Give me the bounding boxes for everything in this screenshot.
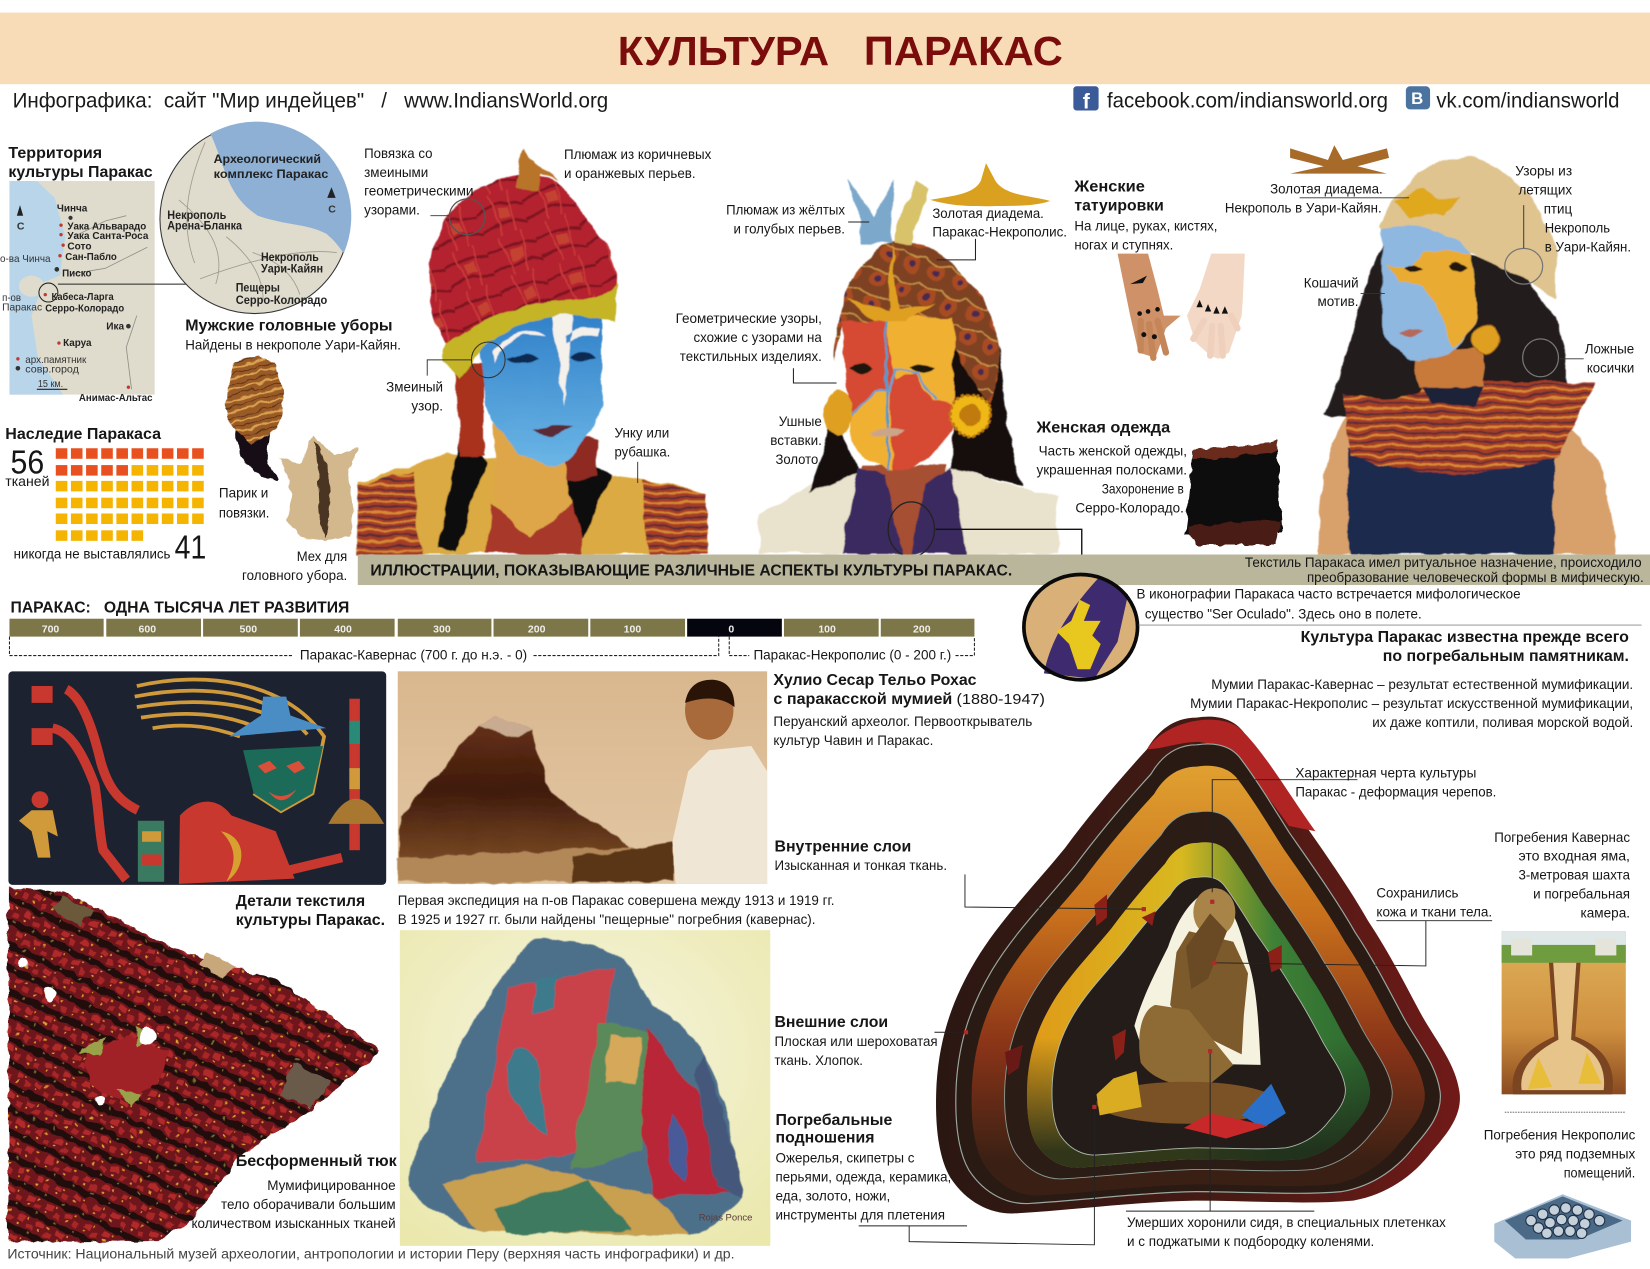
label: wig xyxy=(219,486,269,521)
label: headband xyxy=(364,146,474,218)
label: gold diadem: Паракас-Некрополис. xyxy=(932,225,1067,240)
text: grave offerings xyxy=(776,1112,951,1223)
text: inner layers: Внутренние слои xyxy=(774,838,911,855)
map inset circle: С xyxy=(328,204,336,216)
text: outer layers: Плоская или шероховатая xyxy=(774,1034,938,1049)
text: mythic creature: существо "Ser Oculado". Здесь оно в полете. xyxy=(1145,607,1422,622)
heading: burial monuments xyxy=(1301,629,1629,665)
text: inner layers xyxy=(774,838,947,873)
label: wig: повязки. xyxy=(219,506,269,521)
text: first expedition: Первая экспедиция на п-ов Паракас совершена между 1913 и 1919 гг. xyxy=(398,893,834,908)
image: woven textile fragment xyxy=(8,887,379,1242)
timeline bars: 500 xyxy=(240,623,257,635)
number 56: тканей xyxy=(5,474,49,489)
text: outer layers xyxy=(774,1014,938,1068)
regional map: Паракас xyxy=(2,301,42,313)
label: snake motif: узор. xyxy=(411,398,443,413)
timeline bars xyxy=(9,619,974,637)
markers on cross-section xyxy=(964,900,1216,1109)
label: headband: змеиными xyxy=(364,165,428,180)
label: geometric patterns: Геометрические узоры, xyxy=(676,311,822,326)
icon: gold diadem xyxy=(930,163,1050,206)
regional map xyxy=(0,181,197,404)
timeline bars: 200 xyxy=(528,623,546,635)
timeline bars: 100 xyxy=(624,623,641,635)
label: preserved skin: кожа и ткани тела. xyxy=(1376,905,1492,919)
text: Cavernas burials: это входная яма, xyxy=(1518,849,1630,864)
text: mummies xyxy=(1190,677,1633,730)
text: Julio Tello xyxy=(773,672,1045,748)
tattoos text: ногах и ступнях. xyxy=(1074,237,1173,252)
burial basket xyxy=(1096,1082,1277,1124)
leaders for diadem man xyxy=(793,222,975,383)
text: Cavernas burials xyxy=(1494,830,1630,921)
text: grave offerings: подношения xyxy=(776,1130,874,1147)
panel: territory map xyxy=(0,122,351,404)
text: grave offerings: перьями, одежда, керамика, xyxy=(776,1170,951,1185)
credits line: Инфографика: сайт "Мир индейцев" / www.IndiansWorld.org xyxy=(13,89,608,112)
timeline bars: 600 xyxy=(139,623,156,635)
icon: fur headdress xyxy=(279,436,357,542)
label: geometric patterns xyxy=(676,311,822,364)
number 41: 41 xyxy=(175,530,206,567)
label: flying birds xyxy=(1515,164,1631,254)
text: grave offerings: Ожерелья, скипетры с xyxy=(776,1151,915,1166)
figure: woman with painted face xyxy=(1317,158,1617,555)
map inset circle: Серро-Колорадо xyxy=(236,295,327,307)
image: painted funerary bundle xyxy=(400,930,770,1246)
label: fur xyxy=(242,549,347,583)
timeline bars: 100 xyxy=(818,623,836,635)
label: gold diadem: Золотая диадема. xyxy=(932,206,1044,221)
map inset circle: комплекс Паракас xyxy=(214,169,329,181)
heading: burial monuments: Культура Паракас известна прежде всего xyxy=(1301,629,1629,646)
label: fur: Мех для xyxy=(297,549,347,564)
number 56: 56 xyxy=(11,445,44,482)
label: flying birds: в Уари-Кайян. xyxy=(1545,239,1631,254)
icon: bird gold diadem xyxy=(1290,145,1389,174)
label: brown plume: Плюмаж из коричневых xyxy=(564,147,712,162)
label: flying birds: Узоры из xyxy=(1515,164,1572,179)
tattoos text: На лице, руках, кистях, xyxy=(1074,218,1218,233)
label: gold diadem 2 xyxy=(1225,182,1383,216)
text: Necropolis burials xyxy=(1484,1128,1635,1180)
label: skull deformation: Характерная черта культуры xyxy=(1295,766,1476,781)
timeline heading: ПАРАКАС: ОДНА ТЫСЯЧА ЛЕТ РАЗВИТИЯ xyxy=(11,599,349,616)
label: skull deformation: Паракас - деформация черепов. xyxy=(1295,785,1496,800)
map inset circle: Арена-Бланка xyxy=(167,220,243,232)
number 41: никогда не выставлялись xyxy=(14,547,170,562)
leaders for cross-section xyxy=(859,780,1492,1245)
text: Cavernas burials: 3-метровая шахта xyxy=(1518,868,1630,883)
label: skull deformation xyxy=(1295,766,1496,800)
regional map: Каруа xyxy=(63,337,92,349)
text: Necropolis burials: помещений. xyxy=(1564,1165,1635,1180)
label: brown plume xyxy=(564,147,712,181)
text: textile details: Детали текстиля xyxy=(236,893,365,910)
label: yellow and blue plume xyxy=(726,203,845,237)
title banner: КУЛЬТУРА ПАРАКАС xyxy=(618,28,1063,74)
panel: legacy pictogram xyxy=(5,426,206,567)
text: Cavernas burials: камера. xyxy=(1581,906,1630,921)
title banner xyxy=(0,13,1650,84)
highlight circle: snake headband xyxy=(449,199,485,235)
text: Julio Tello: (1880-1947) xyxy=(957,692,1045,708)
period labels: Паракас-Некрополис (0 - 200 г.) xyxy=(753,648,951,663)
label: seated burial: и с поджатыми к подбородку коленями. xyxy=(1127,1234,1374,1249)
leaders for woman xyxy=(1300,198,1584,359)
label: snake motif xyxy=(386,379,443,413)
label: feline motif: мотив. xyxy=(1317,294,1359,309)
source note: Источник: Национальный музей археологии, антропологии и истории Перу (верхняя часть инфографики) и др. xyxy=(7,1246,735,1261)
label: headband: узорами. xyxy=(364,203,420,218)
regional map: Чинча xyxy=(57,203,87,214)
tattoos text: Женские xyxy=(1073,179,1145,196)
text: Necropolis burials: Погребения Некрополис xyxy=(1484,1128,1635,1143)
text: Julio Tello: Хулио Сесар Тельо Рохас xyxy=(773,672,977,689)
text: Julio Tello: Перуанский археолог. Первооткрыватель xyxy=(773,714,1032,729)
text: inner layers: Изысканная и тонкая ткань. xyxy=(774,858,947,873)
clothing text: Захоронение в xyxy=(1102,482,1184,496)
heading: burial monuments: по погребальным памятникам. xyxy=(1383,648,1629,665)
period labels xyxy=(300,648,951,663)
map inset circle: Некрополь xyxy=(261,252,319,264)
legacy heading: Наследие Паракаса xyxy=(5,426,162,443)
text: Cavernas burials: и погребальная xyxy=(1533,887,1630,902)
label: preserved skin: Сохранились xyxy=(1376,886,1458,901)
text: shapeless bale: тело оборачивали большим xyxy=(221,1197,396,1212)
regional map: Уака Санта-Роса xyxy=(67,230,149,242)
clothing text: Женская одежда xyxy=(1035,419,1171,436)
text: grave offerings: инструменты для плетения xyxy=(776,1208,945,1223)
clothing text xyxy=(1035,419,1187,515)
label: ear inserts: вставки. xyxy=(770,433,822,448)
label: flying birds: летящих xyxy=(1518,183,1572,198)
label: yellow and blue plume: Плюмаж из жёлтых xyxy=(726,203,845,218)
caption band: ИЛЛЮСТРАЦИИ, ПОКАЗЫВАЮЩИЕ РАЗЛИЧНЫЕ АСПЕКТЫ КУЛЬТУРЫ ПАРАКАС. xyxy=(370,563,1012,580)
timeline bars: 700 xyxy=(42,623,59,635)
label: feline motif: Кошачий xyxy=(1304,275,1359,290)
regional map: 15 км. xyxy=(38,378,63,390)
timeline brackets xyxy=(9,637,974,656)
diagram: shaft tomb xyxy=(1502,931,1626,1094)
label: snake motif: Змеиный xyxy=(386,379,443,394)
regional map: п-ов xyxy=(2,292,21,304)
label: geometric patterns: схожие с узорами на xyxy=(693,330,822,345)
label: ear inserts: Ушные xyxy=(779,414,822,429)
label: feline motif xyxy=(1304,275,1359,309)
label: gold diadem 2: Золотая диадема. xyxy=(1270,182,1383,197)
label: ear inserts xyxy=(770,414,822,467)
timeline xyxy=(9,599,974,663)
regional map: Писко xyxy=(62,268,92,280)
text: mummies: Мумии Паракас-Некрополис – результат искусственной мумификации, xyxy=(1190,696,1633,711)
number 41 xyxy=(14,530,206,567)
headdress heading xyxy=(185,317,401,352)
diagram: necropolis chamber xyxy=(1494,1194,1631,1258)
tattoos text xyxy=(1073,179,1218,252)
icon: wig and bands xyxy=(227,357,284,481)
label: gold diadem xyxy=(932,206,1067,240)
tattoos text: татуировки xyxy=(1074,197,1164,214)
unit chart of 56 textiles xyxy=(56,448,204,541)
regional map: Серро-Колорадо xyxy=(45,302,125,314)
label: false braids: Ложные xyxy=(1585,342,1634,357)
label: geometric patterns: текстильных изделиях. xyxy=(680,349,822,364)
map heading xyxy=(8,145,153,181)
timeline bars: 400 xyxy=(334,623,352,635)
leaders for man with turban xyxy=(427,216,638,483)
text: first expedition xyxy=(398,893,834,927)
label: preserved skin xyxy=(1376,886,1492,919)
image: textile with flying figure xyxy=(8,671,386,885)
label: seated burial xyxy=(1127,1215,1446,1249)
label: unku shirt xyxy=(615,426,670,460)
regional map: Анимас-Альтас xyxy=(79,392,153,404)
figure: man with gold diadem xyxy=(758,179,1059,557)
caption band xyxy=(358,555,1650,585)
map inset circle: Пещеры xyxy=(236,282,280,294)
credits line xyxy=(13,86,1619,113)
text: mythic creature xyxy=(1136,587,1642,625)
map inset circle: Уари-Кайян xyxy=(261,264,323,276)
clothing text: украшенная полосками. xyxy=(1037,463,1187,478)
panel: female tattoos xyxy=(1073,179,1245,359)
highlight circle: bird pattern xyxy=(1505,248,1543,284)
label: headband: геометрическими xyxy=(364,184,474,199)
clothing text: Часть женской одежды, xyxy=(1039,444,1187,459)
image: Tello with mummy xyxy=(398,671,767,884)
text: shapeless bale xyxy=(192,1153,397,1231)
mummy figure xyxy=(1096,888,1286,1139)
connector to medallion xyxy=(935,529,1082,573)
text: outer layers: ткань. Хлопок. xyxy=(774,1053,863,1068)
label: false braids xyxy=(1585,342,1634,375)
text: grave offerings: еда, золото, ножи, xyxy=(776,1189,890,1204)
text: mummies: Мумии Паракас-Кавернас – результат естественной мумификации. xyxy=(1211,677,1633,692)
regional map: Сан-Пабло xyxy=(65,251,117,263)
map heading: культуры Паракас xyxy=(8,164,153,181)
map inset circle xyxy=(160,122,351,314)
label: fur: головного убора. xyxy=(242,568,347,583)
credits line: B xyxy=(1411,89,1423,108)
panel: female clothing xyxy=(1035,419,1282,545)
highlight circle: false braids xyxy=(1523,339,1558,377)
map inset circle: Некрополь xyxy=(167,210,226,222)
headdress heading: Найдены в некрополе Уари-Кайян. xyxy=(185,337,401,352)
regional map: С xyxy=(17,220,25,232)
regional map: Ика xyxy=(106,320,124,332)
highlight circle: snake motif xyxy=(471,342,505,378)
label: ear inserts: Золото. xyxy=(776,452,822,467)
label: unku shirt: рубашка. xyxy=(615,445,670,460)
period labels: Паракас-Кавернас (700 г. до н.э. - 0) xyxy=(300,648,527,663)
ring bird motifs xyxy=(1005,894,1282,1075)
text: shapeless bale: количеством изысканных тканей xyxy=(192,1216,396,1231)
clothing text: Серро-Колорадо. xyxy=(1075,500,1184,515)
map inset circle: Археологический xyxy=(214,154,321,166)
panel: male headdresses xyxy=(185,317,401,583)
diagram: mummy bundle cross-section xyxy=(936,717,1460,1213)
text: textile details: культуры Паракас. xyxy=(236,912,385,929)
regional map: Уака Альварадо xyxy=(67,220,147,232)
text: mythic creature: В иконографии Паракаса часто встречается мифологическое xyxy=(1136,587,1521,602)
medallion: Ser Oculado xyxy=(1024,575,1138,680)
label: headband: Повязка со xyxy=(364,146,433,161)
credits line: facebook.com/indiansworld.org xyxy=(1107,89,1388,112)
timeline bars: 0 xyxy=(728,623,734,635)
label: brown plume: и оранжевых перьев. xyxy=(564,166,696,181)
image: painted funerary bundle: Rojas Ponce xyxy=(699,1213,752,1224)
credits line: f xyxy=(1083,90,1091,113)
text: mummies: их даже коптили, поливая морской водой. xyxy=(1372,715,1633,730)
label: flying birds: птиц xyxy=(1544,202,1572,217)
label: yellow and blue plume: и голубых перьев. xyxy=(733,222,845,237)
regional map: арх.памятник xyxy=(25,354,87,366)
label: gold diadem 2: Некрополь в Уари-Кайян. xyxy=(1225,201,1382,216)
regional map: Кабеса-Ларга xyxy=(52,291,114,303)
map heading: Территория xyxy=(8,145,102,162)
label: wig: Парик и xyxy=(219,486,268,501)
caption band: Текстиль Паракаса имел ритуальное назначение, происходило xyxy=(1245,555,1642,570)
highlight circle: Ser Oculado on collar xyxy=(888,502,934,557)
timeline bars: 200 xyxy=(913,623,931,635)
figure: man with red turban xyxy=(358,147,707,555)
text: first expedition: В 1925 и 1927 гг. были найдены "пещерные" погребния (кавернас). xyxy=(398,912,816,927)
text: Cavernas burials: Погребения Кавернас xyxy=(1494,830,1630,845)
timeline bars: 300 xyxy=(433,623,451,635)
text: Necropolis burials: это ряд подземных xyxy=(1515,1147,1635,1162)
credits line: vk.com/indiansworld xyxy=(1436,89,1619,112)
label: seated burial: Умерших хоронили сидя, в специальных плетенках xyxy=(1127,1215,1446,1230)
regional map: Сото xyxy=(67,240,92,252)
icon: tattooed hands xyxy=(1118,254,1245,359)
text: Julio Tello: культур Чавин и Паракас. xyxy=(773,733,933,748)
text: shapeless bale: Бесформенный тюк xyxy=(236,1153,397,1170)
icon: black garment xyxy=(1185,442,1282,545)
text: Julio Tello: с паракасской мумией xyxy=(773,691,952,708)
headdress heading: Мужские головные уборы xyxy=(185,317,393,334)
text: grave offerings: Погребальные xyxy=(776,1112,892,1129)
regional map: совр.город xyxy=(25,363,79,375)
label: unku shirt: Унку или xyxy=(615,426,669,441)
caption band: преобразование человеческой формы в мифическую. xyxy=(1307,570,1644,585)
label: flying birds: Некрополь xyxy=(1545,221,1610,236)
text: textile details xyxy=(236,893,385,929)
regional map: о-ва Чинча xyxy=(0,253,51,265)
text: outer layers: Внешние слои xyxy=(774,1014,888,1031)
label: false braids: косички xyxy=(1587,360,1634,375)
text: shapeless bale: Мумифицированное xyxy=(267,1178,396,1193)
